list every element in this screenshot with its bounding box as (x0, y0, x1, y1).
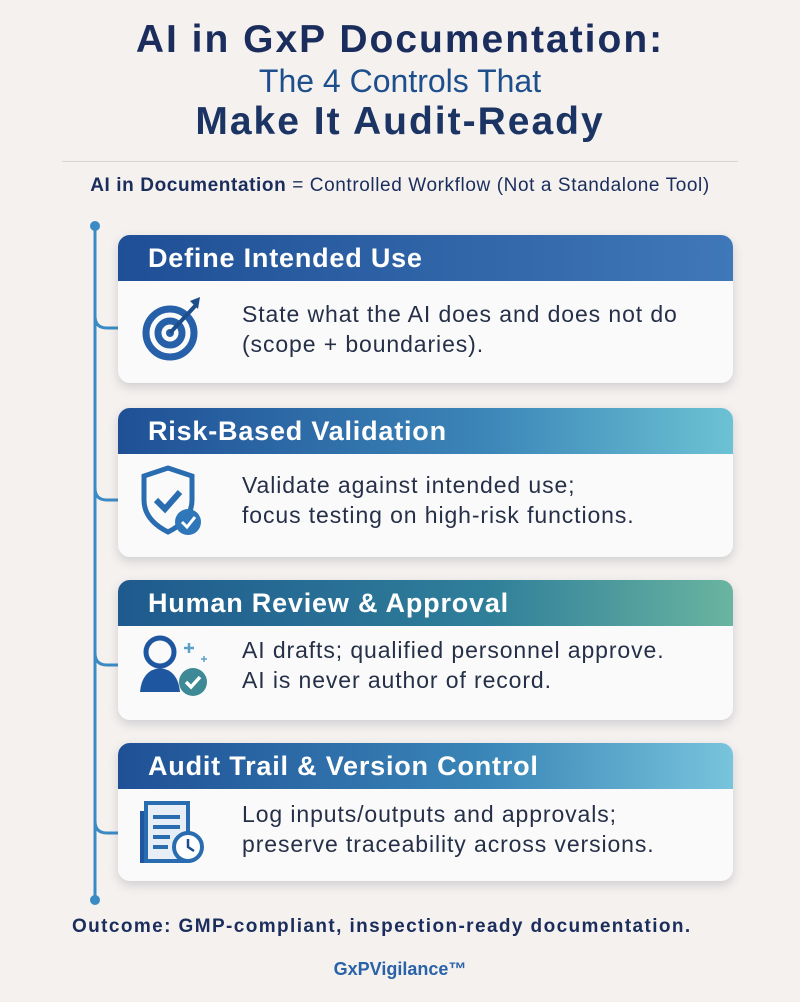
outcome: Outcome: GMP-compliant, inspection-ready documentation. (72, 916, 692, 937)
panel: define intended use (118, 235, 733, 383)
footer brand: GxPVigilance™ (334, 959, 466, 979)
panel: audit trail (118, 743, 733, 881)
panel: define intended use: (scope + boundaries). (242, 331, 484, 357)
panel: risk-based validation: Validate against intended use; (242, 472, 575, 498)
icon: target (142, 297, 200, 360)
icon: shield (142, 465, 201, 535)
panel: audit trail: Audit Trail & Version Control (148, 751, 539, 781)
timeline (90, 221, 118, 905)
panel: human review: AI drafts; qualified personnel approve. (242, 637, 665, 663)
panel: human review (118, 580, 733, 720)
title: AI in GxP Documentation: (136, 18, 664, 61)
panel: human review: Human Review & Approval (148, 588, 509, 618)
title: Make It Audit-Ready (195, 100, 605, 143)
subtitle: AI in Documentation = Controlled Workflow (Not a Standalone Tool) (90, 175, 710, 196)
panel: define intended use: Define Intended Use (148, 243, 423, 273)
title (136, 18, 664, 143)
title: The 4 Controls That (259, 63, 541, 99)
panel: risk-based validation (118, 408, 733, 557)
panel: risk-based validation: focus testing on high-risk functions. (242, 502, 635, 528)
panel: risk-based validation: Risk-Based Validation (148, 416, 447, 446)
panel: human review: AI is never author of record. (242, 667, 552, 693)
icon: person with check (140, 636, 207, 696)
panel: audit trail: preserve traceability across versions. (242, 831, 655, 857)
panel: define intended use: State what the AI does and does not do (242, 301, 678, 327)
icon: document with clock (140, 801, 204, 863)
panel: audit trail: Log inputs/outputs and approvals; (242, 801, 617, 827)
